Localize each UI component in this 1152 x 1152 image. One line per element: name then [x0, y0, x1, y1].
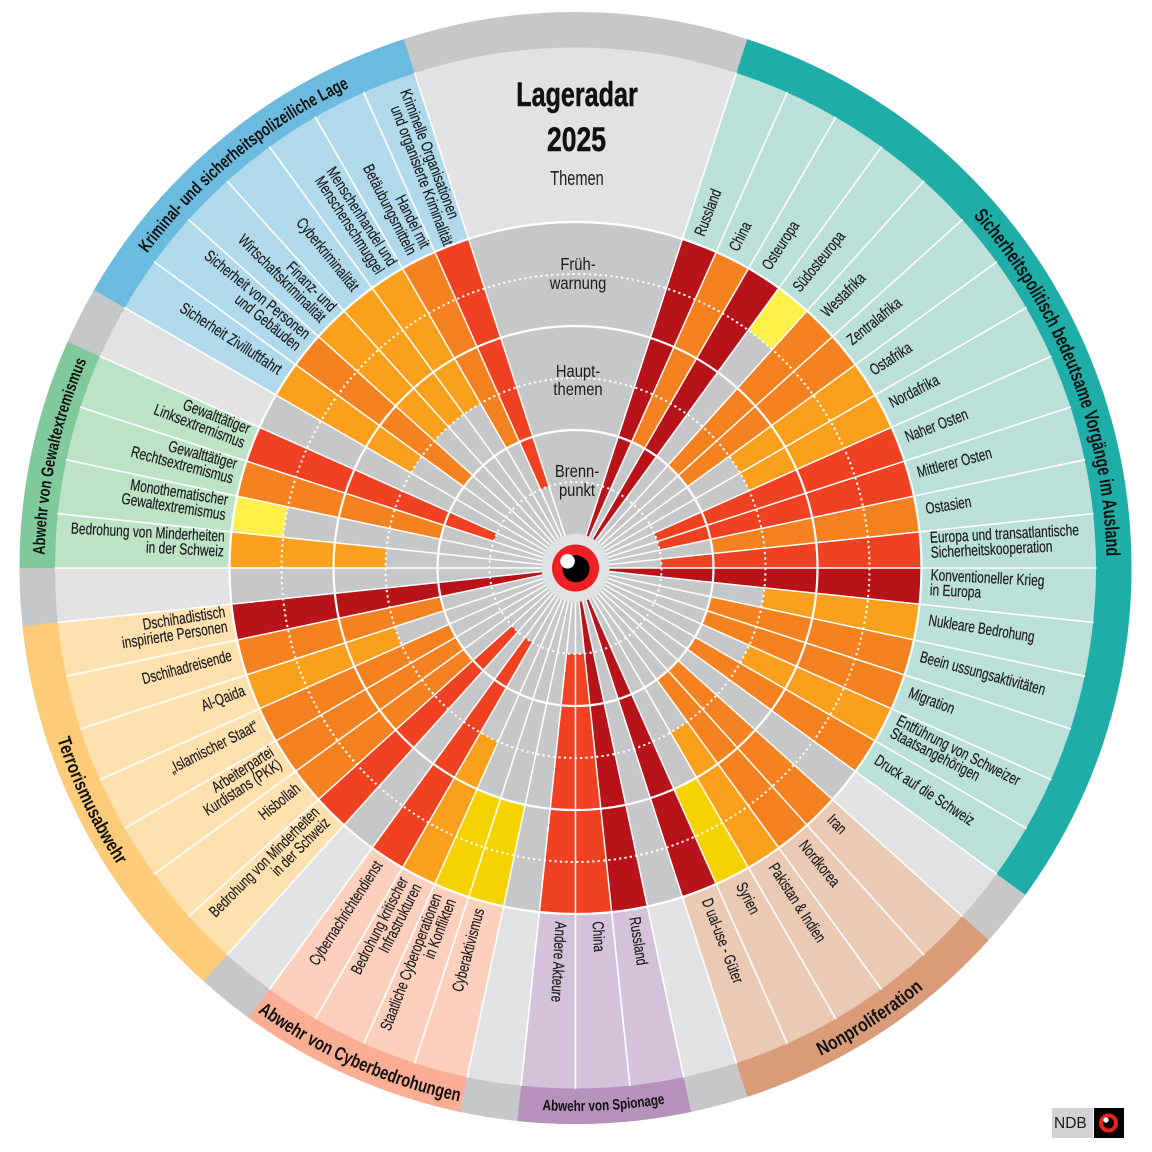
topic labels: Nonproliferation: Pakistan & Indien: [765, 859, 830, 945]
topic labels: Gewaltextremismus: [70, 386, 253, 560]
topic labels: Ausland: Südosteuropa: [789, 227, 849, 295]
title: Lageradar: [516, 76, 638, 114]
topic labels: Ausland: Osteuropa: [758, 217, 803, 273]
heading: Abwehr von Gewaltextremismus: Abwehr von Gewaltextremismus: [32, 358, 86, 555]
cells: Ausland: [586, 239, 923, 772]
topic labels: Ausland: Nukleare Bedrohung: [927, 611, 1036, 645]
logo: NDB: [1052, 1108, 1124, 1138]
ring label: Hauptthemen: Haupt-: [556, 362, 600, 381]
topic labels: Nonproliferation: [698, 810, 851, 986]
panel: Sicherheitspolitisch bedeutsame Vorgänge im Ausland: [682, 39, 1132, 895]
topic labels: Ausland: Naher Osten: [902, 405, 970, 445]
topic labels: Nonproliferation: Iran: [824, 810, 851, 837]
cells: Terrorismus: [230, 540, 542, 825]
topic labels: Kriminal: Finanz- und: [283, 258, 341, 315]
heading: Nonproliferation: Nonproliferation: [816, 982, 923, 1056]
ring label: Hauptthemen: themen: [553, 380, 603, 399]
topic labels: Ausland: Druck auf die Schweiz: [871, 751, 978, 829]
topic labels: Kriminal: und organisierte Kriminalität: [387, 103, 457, 248]
topic labels: Ausland: Staatsangehörigen: [888, 724, 983, 784]
topic labels: Kriminal: Betäubungsmitteln: [360, 161, 421, 258]
panel: Kriminal- und sicherheitspolizeiliche Lage: [94, 39, 469, 395]
topic labels: Gewaltextremismus: in der Schweiz: [146, 538, 224, 560]
cells: Cyber: [371, 624, 533, 906]
topic labels: Ausland: Ostasien: [924, 492, 972, 517]
topic labels: Kriminal: [177, 86, 471, 378]
topic labels: Ausland: Europa und transatlantische: [929, 520, 1079, 546]
topic labels: Ausland: China: [725, 218, 755, 254]
heading: Terrorismusabwehr: Terrorismusabwehr: [58, 735, 126, 863]
topic labels: Terrorismus: Dschihadistisch: [141, 602, 226, 633]
icon: radar eye: [542, 534, 610, 602]
radar chart: [230, 222, 923, 916]
topic labels: Ausland: Migration: [906, 683, 957, 717]
topic labels: Nonproliferation: Syrien: [733, 879, 764, 917]
topic labels: Ausland: Russland: [690, 186, 725, 238]
topic labels: Nonproliferation: Nordkorea: [796, 836, 844, 890]
topic labels: Terrorismus: Al-Qaida: [198, 681, 248, 714]
topic labels: Terrorismus: Hisbollah: [255, 779, 304, 823]
topic labels: Kriminal: Kriminelle Organisationen: [397, 86, 463, 221]
topic labels: Nonproliferation: D ual-use - Güter: [698, 896, 748, 986]
panel: Abwehr von Spionage: [517, 908, 691, 1124]
topic labels: Cyber: Infrastrukturen: [375, 880, 425, 956]
topic labels: Ausland: Sicherheitskooperation: [930, 537, 1053, 561]
topic labels: Gewaltextremismus: Gewaltextremismus: [120, 489, 227, 523]
topic labels: Spionage: Andere Akteure: [548, 921, 570, 1003]
topic labels: Ausland: Nordafrika: [886, 370, 942, 411]
ring label: Brennpunkt: [555, 462, 599, 500]
topic labels: Cyber: [305, 857, 488, 1038]
cells: Kriminal: [276, 237, 574, 490]
topic labels: Spionage: Russland: [626, 916, 652, 966]
topic labels: Cyber: Bedrohung kritischer: [347, 873, 412, 977]
topic labels: Kriminal: Menschenschmuggel: [311, 172, 388, 277]
topic labels: Kriminal: Wirtschaftskriminalität: [235, 231, 330, 326]
panel: Abwehr von Gewaltextremismus: [20, 342, 259, 569]
topic labels: Ausland: in Europa: [929, 580, 982, 601]
ring label: Frühwarnung: [549, 255, 606, 293]
topic labels: Gewaltextremismus: Gewalttätiger: [166, 437, 239, 472]
topic labels: Gewaltextremismus: Gewalttätiger: [181, 395, 253, 437]
title: Themen: [550, 167, 604, 190]
topic labels: Gewaltextremismus: Rechtsextremismus: [129, 442, 235, 487]
topic labels: Ausland: Mittlerer Osten: [915, 443, 994, 481]
ring label: Brennpunkt: Brenn-: [555, 462, 599, 481]
heading: Kriminal- und sicherheitspolizeiliche Lage: Kriminal- und sicherheitspolizeiliche Lage: [138, 80, 348, 253]
topic labels: Kriminal: und Gebäuden: [232, 290, 305, 354]
topic labels: Spionage: [548, 916, 652, 1003]
topic labels: Cyber: Cyberaktivismus: [448, 906, 488, 994]
topic labels: Ausland: [690, 186, 1080, 829]
topic labels: Kriminal: Sicherheit von Personen: [201, 246, 314, 342]
ring label: Frühwarnung: warnung: [549, 274, 606, 293]
topic labels: Terrorismus: [118, 602, 333, 931]
topic labels: Ausland: Beein ussungsaktivitäten: [918, 647, 1048, 698]
topic labels: Terrorismus: in der Schweiz: [267, 813, 333, 879]
panel: Abwehr von Cyberbedrohungen: [248, 848, 504, 1112]
cells: Nonproliferation: [556, 599, 833, 899]
topic labels: Ausland: Zentralafrika: [843, 293, 905, 348]
topic labels: Kriminal: Cyberkriminalität: [293, 214, 363, 295]
cells: Gewaltextremismus: [230, 427, 505, 568]
topic labels: Cyber: in Konflikten: [420, 896, 459, 961]
topic labels: Gewaltextremismus: Linksextremismus: [152, 400, 248, 451]
cells: Spionage: [539, 601, 647, 916]
topic labels: Spionage: China: [589, 921, 609, 952]
ring label: Brennpunkt: punkt: [559, 481, 595, 500]
ring label: Hauptthemen: [553, 362, 603, 399]
topic labels: Cyber: Staatliche Cyberoperationen: [376, 891, 445, 1033]
topic labels: Ausland: Konventioneller Krieg: [930, 565, 1045, 589]
topic labels: Ausland: Westafrika: [817, 269, 869, 320]
topic labels: Ausland: Ostafrika: [866, 338, 915, 379]
topic labels: Terrorismus: Bedrohung von Minderheiten: [205, 803, 323, 920]
topic labels: Terrorismus: Arbeiterpartei: [208, 742, 277, 796]
topic labels: Gewaltextremismus: Bedrohung von Minderheiten: [71, 519, 225, 545]
ring label: Frühwarnung: Früh-: [560, 255, 596, 274]
panel: Nonproliferation: [682, 800, 989, 1097]
heading: Sicherheitspolitisch: Sicherheitspolitisch bedeutsame Vorgänge im Ausland: [974, 208, 1121, 556]
topic labels: Terrorismus: inspirierte Personen: [121, 617, 229, 652]
topic labels: Cyber: Cybernachrichtendienst: [305, 857, 386, 969]
topic labels: Terrorismus: Dschihadreisende: [140, 646, 234, 688]
title: 2025: [547, 121, 606, 159]
heading: Abwehr von Cyberbedrohungen: Abwehr von Cyberbedrohungen: [258, 1004, 460, 1102]
topic labels: Ausland: Entführung von Schweizer: [894, 711, 1024, 789]
topic labels: Kriminal: Menschenhandel und: [323, 163, 401, 269]
topic labels: Kriminal: Sicherheit Zivilluftfahrt: [177, 299, 286, 378]
topic labels: Gewaltextremismus: Monothematischer: [129, 475, 229, 509]
topic labels: Terrorismus: „Islamischer Staat“: [166, 716, 261, 777]
panel: Terrorismusabwehr: [22, 602, 344, 981]
topic labels: Kriminal: Handel mit: [392, 192, 434, 251]
logo: NDB: NDB: [1054, 1115, 1087, 1132]
heading: Abwehr von Spionage: Abwehr von Spionage: [542, 1096, 664, 1112]
topic labels: Terrorismus: Kurdistans (PKK): [200, 755, 285, 819]
title: [516, 76, 638, 190]
